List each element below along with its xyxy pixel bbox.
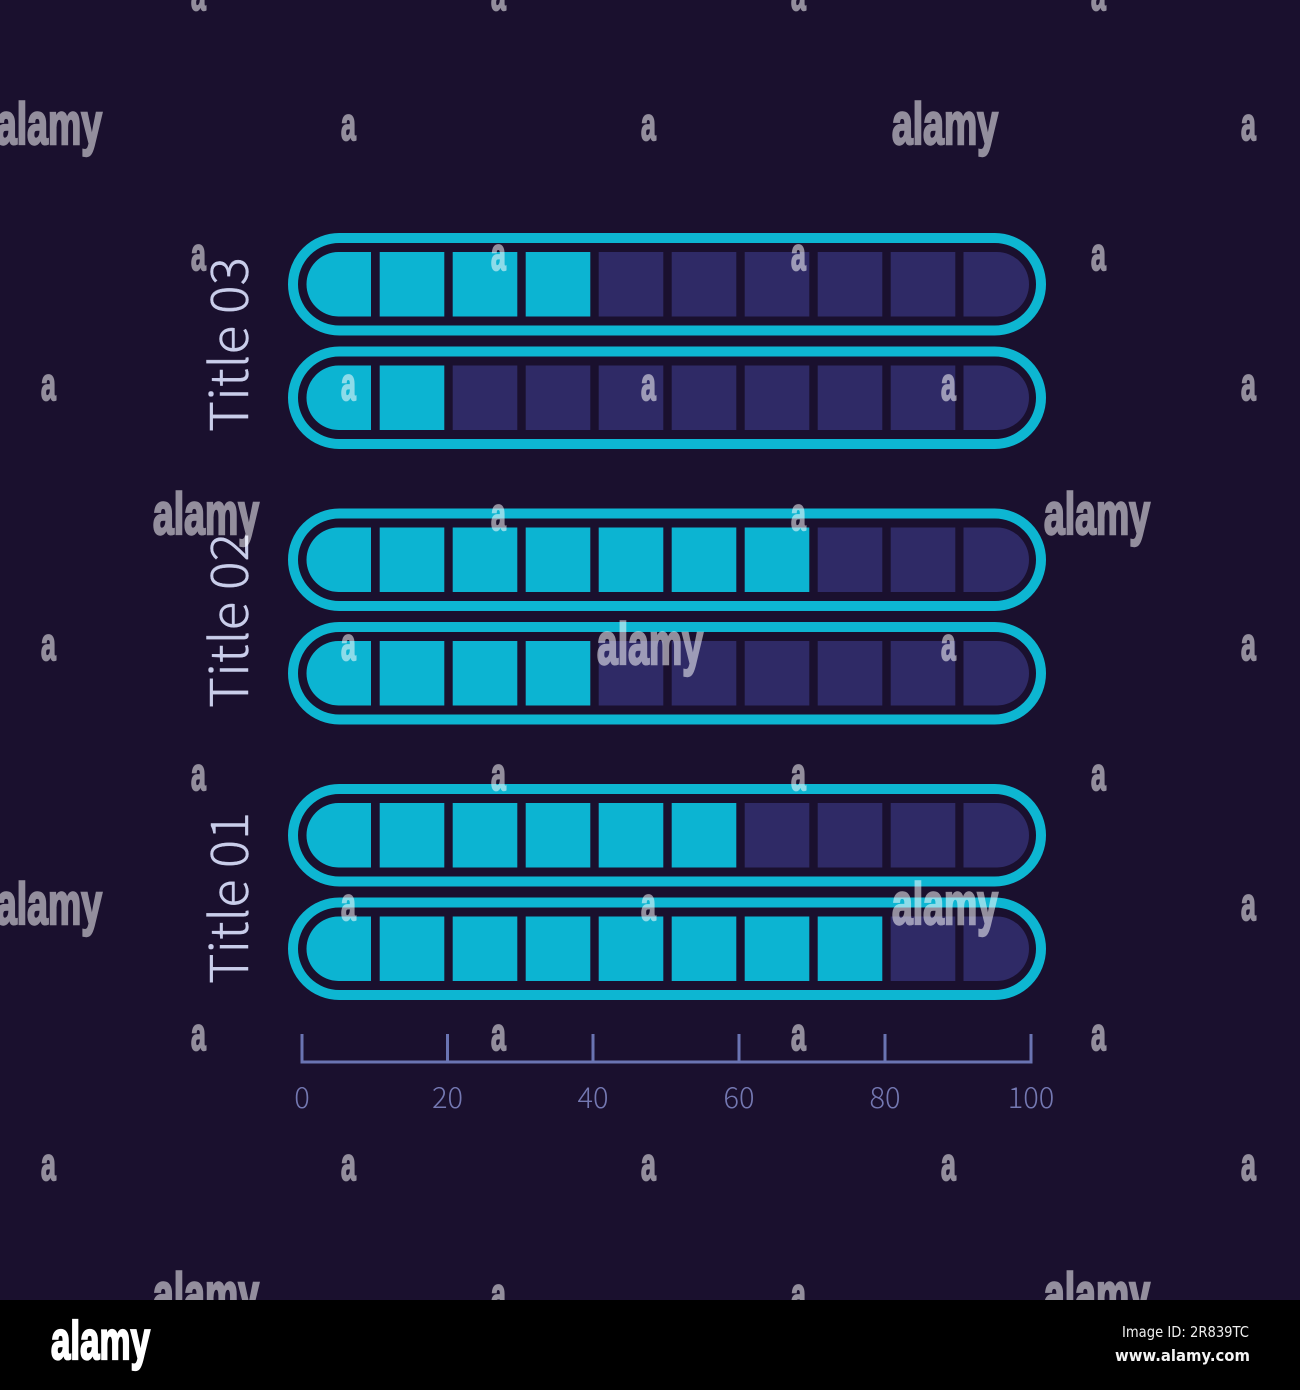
watermark: large alamy marks: alamy — [892, 92, 998, 157]
watermark: small a marks: aaaaa — [41, 358, 1257, 410]
watermark: small a marks: aa — [491, 488, 807, 540]
axis scale 0 to 100: 100 — [1008, 1075, 1054, 1117]
progress bar: Title 03 upper, 40 percent — [293, 238, 1041, 330]
watermark: large alamy marks: alamy — [153, 1262, 259, 1327]
axis scale 0 to 100: 40 — [577, 1075, 609, 1117]
title: Title 03: Title 03 — [188, 257, 263, 432]
watermark: small a marks: aaaa — [191, 748, 1107, 800]
axis scale 0 to 100: 20 — [432, 1075, 463, 1117]
axis scale 0 to 100: 0 — [294, 1075, 310, 1117]
watermark: small a marks: aaa — [341, 98, 1257, 150]
watermark: small a marks: aaaa — [191, 228, 1107, 280]
watermark: small a marks: aaaaa — [41, 1138, 1257, 1190]
progress bar: Title 02 upper, 70 percent — [293, 514, 1041, 606]
watermark: small a marks: aa — [491, 1268, 807, 1320]
axis scale 0 to 100: 80 — [869, 1075, 901, 1117]
watermark: large alamy marks: alamy — [1044, 482, 1150, 547]
image id: Image ID: 2R839TC — [1122, 1323, 1249, 1341]
website: www.alamy.com — [1115, 1346, 1250, 1365]
progress bar: Title 01 lower, 80 percent — [293, 902, 1041, 995]
watermark: large alamy marks: alamy — [1044, 1262, 1150, 1327]
footer band — [0, 1300, 1300, 1390]
watermark: small a marks: aaaa — [41, 618, 1257, 670]
progress bar: Title 01 upper, 60 percent — [293, 789, 1041, 882]
progress bar: Title 03 lower, 20 percent — [293, 352, 1041, 444]
footer logo: alamy — [51, 1311, 150, 1371]
watermark: large alamy marks: alamy — [597, 612, 703, 677]
watermark: large alamy marks: alamy — [892, 872, 998, 937]
progress bar: Title 02 lower, 40 percent — [293, 627, 1041, 720]
title: Title 02: Title 02 — [188, 533, 263, 708]
watermark: large alamy marks: alamy — [0, 872, 102, 937]
watermark: small a marks: aaaa — [191, 1008, 1107, 1060]
axis scale 0 to 100 — [294, 1034, 1054, 1117]
title: Title 01: Title 01 — [188, 812, 263, 984]
axis scale 0 to 100: 60 — [723, 1075, 755, 1117]
watermark: large alamy marks: alamy — [0, 92, 102, 157]
watermark: large alamy marks — [0, 92, 1150, 1327]
watermark: small a marks: aaa — [341, 878, 1257, 930]
watermark: large alamy marks: alamy — [153, 482, 259, 547]
